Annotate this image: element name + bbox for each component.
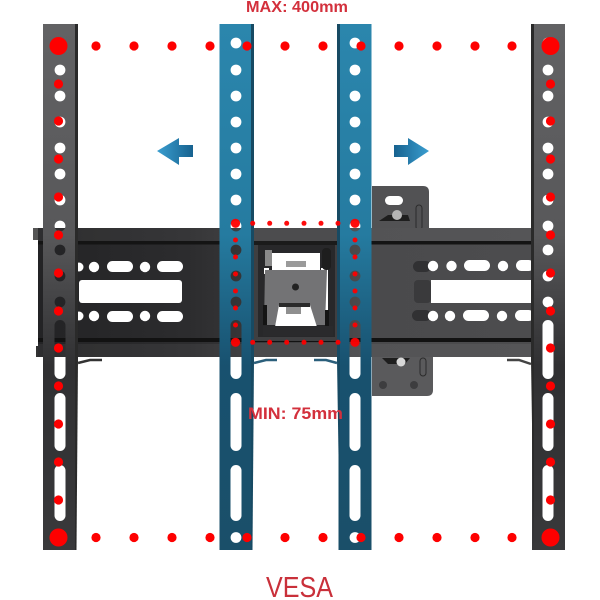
dots: minimum VESA pattern <box>231 219 360 347</box>
back plate: lower wall plate <box>372 355 433 396</box>
crossbar cutouts: right side <box>412 260 534 321</box>
feet: small hooks under the crossbar <box>78 360 531 364</box>
back plate: upper wall plate <box>372 186 429 230</box>
rail: left blue upright <box>220 24 254 550</box>
dots: maximum VESA pattern <box>50 37 560 546</box>
rail: left grey upright <box>43 24 78 550</box>
centre bracket: swivel mount <box>252 228 338 357</box>
crossbar: horizontal arm <box>33 228 535 357</box>
rail: right blue upright <box>337 24 372 550</box>
rail: right grey upright <box>531 24 565 550</box>
arrow: left <box>157 138 193 165</box>
crossbar cutouts: left side <box>74 261 183 322</box>
arrow: right <box>394 138 429 165</box>
label: minimum size: MIN: 75mm <box>248 405 343 423</box>
